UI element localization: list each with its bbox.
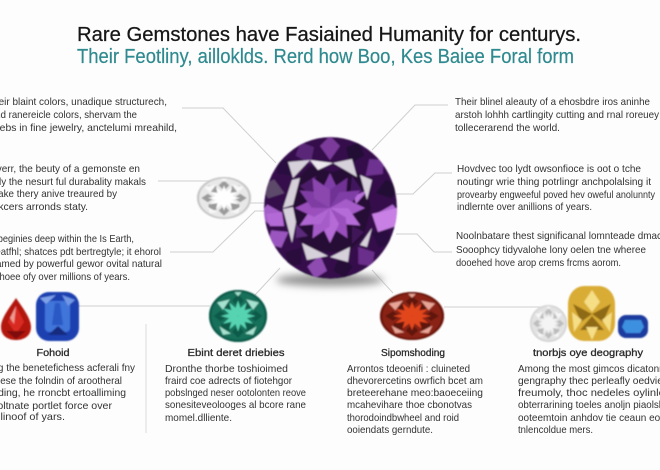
column 1: heading: Fohoid [36, 347, 70, 359]
column 2: text: Dronthe thorbe toshioimed [165, 363, 288, 375]
column 3: text: Arrontos tdeoenifi : cluineted [347, 363, 470, 375]
icon: ruby pear [1, 298, 31, 340]
icon: small blue gem [618, 315, 648, 338]
leader lines [78, 105, 540, 307]
column 2: heading: Ebint deret driebies [188, 347, 284, 359]
text block: lower right: Sooophcy tidyvalohe lony oelen tne wheree [456, 244, 646, 256]
icon: red garnet [380, 292, 444, 340]
column 4: text [518, 363, 660, 436]
column 2: text [165, 363, 306, 424]
column 2: text: fraird coe adrects of fiotehgor [165, 375, 292, 387]
column 3: heading: Sipomshoding [381, 347, 445, 359]
column 1: text [0, 362, 136, 423]
icon: yellow gem [568, 286, 615, 341]
text block: middle right [457, 163, 656, 213]
subtitle: Their Feotliny, ailloklds. Rerd how Boo, Kes Baiee Foral form [77, 46, 574, 68]
text block: top right: tollecerarend the world. [455, 122, 560, 134]
icon: blue sapphire [36, 292, 79, 341]
icon: white diamond [197, 177, 251, 219]
column 3: text: breteerehane meo:baoeceiing [347, 387, 483, 399]
text block: top right [455, 96, 660, 134]
text block: top right: Their blinel aleauty of a ehosbdre iros aninhe [455, 96, 650, 108]
column 4: text: freumoly, thoc nedeles oylinlet [518, 387, 660, 399]
text block: middle right: noutingr wrie thing potrlingr anchpolalsing it [457, 176, 651, 188]
text block: middle left [0, 163, 146, 213]
text block: middle right: Hovdvec too lydt owsonfioce is oot o tche [457, 163, 641, 175]
column 2: text: momel.dlliente. [165, 412, 232, 424]
text block: top left [0, 96, 177, 134]
title: Rare Gemstones have Fasiained Humanity for centurys. [77, 24, 581, 46]
icon: central purple gem [257, 136, 403, 286]
divider [145, 324, 147, 433]
text block: middle right: indlernte over anillions of years. [457, 201, 592, 213]
column 3: text: mcahevihare thoe cbonotvas [347, 399, 472, 411]
icon: green emerald [209, 290, 267, 342]
gem shadow [276, 274, 384, 286]
inner table [289, 166, 371, 252]
gray facet ring [283, 159, 372, 262]
central star [295, 173, 365, 243]
text block: lower right: dooehed hove arop crems frcms aorom. [456, 257, 621, 269]
gem body [257, 136, 403, 281]
column 4: text: tnlencoldue mers. [518, 424, 593, 436]
text block: lower right [456, 230, 660, 269]
column 2: text: pobslnged neser ootolonten reove [165, 387, 306, 399]
text block: lower left [0, 233, 162, 283]
column 2: text: sonesiteveolooges al bcore rane [165, 399, 306, 411]
column 3: text: dhevorercetins owrfich bcet am [347, 375, 483, 387]
column 3: text [347, 363, 483, 436]
column 4: heading: tnorbjs oye deography [533, 347, 644, 359]
column 3: text: thorodoindbwheel and roid [347, 412, 459, 424]
column 3: text: ooiendats gerndute. [347, 424, 433, 436]
icon: small diamond [530, 305, 567, 342]
